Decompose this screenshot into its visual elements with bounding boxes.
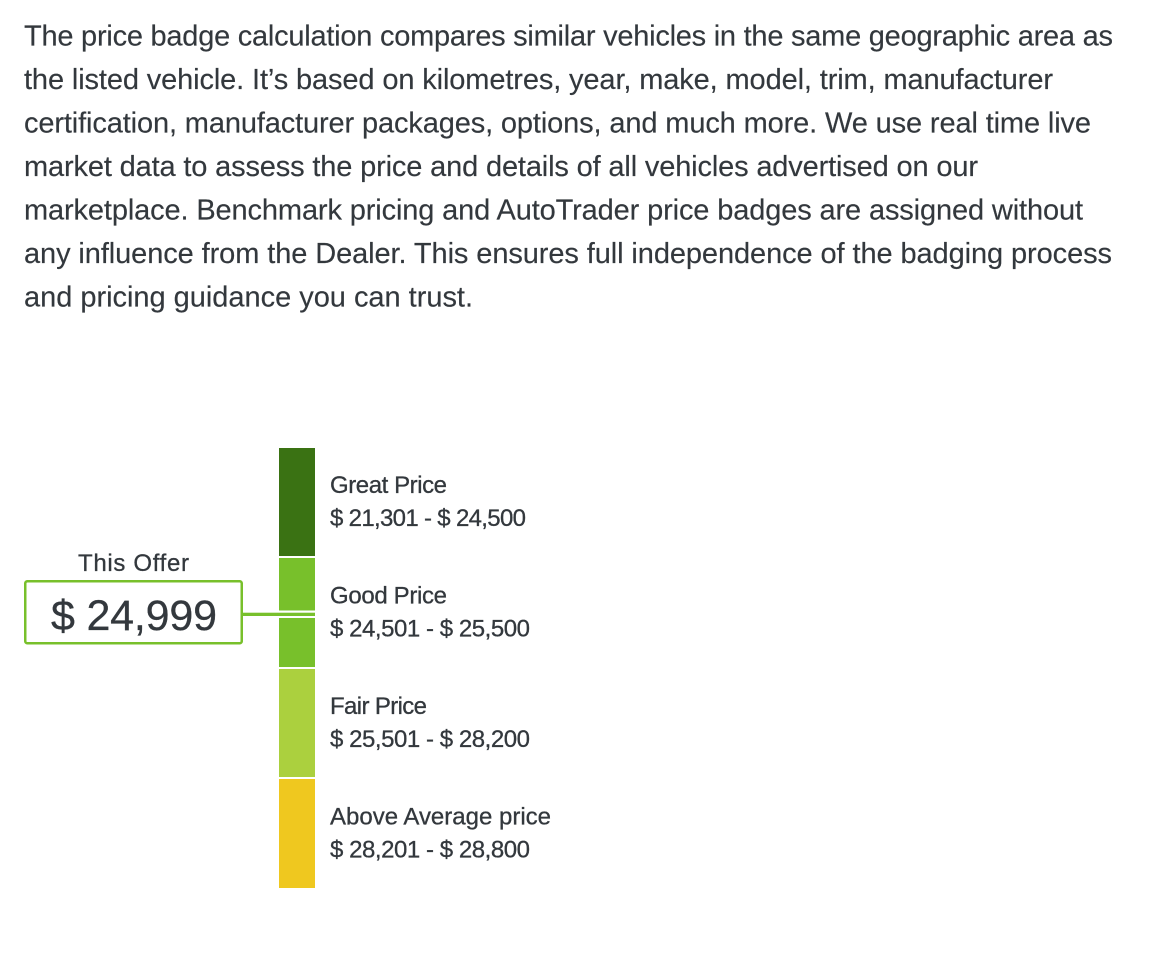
segment: fair price [279, 669, 315, 777]
text block: price badge explanation: and pricing guidance you can trust. [24, 282, 473, 314]
text block: price badge explanation: certification, manufacturer packages, options, and much more. We use real time live [24, 108, 1091, 140]
label: above average price: $ 28,201 - $ 28,800 [330, 836, 530, 864]
offer label: This Offer [78, 550, 189, 577]
text block: price badge explanation: market data to assess the price and details of all vehicles advertised on our [24, 151, 978, 183]
label: above average price [330, 804, 551, 864]
text block: price badge explanation: any influence from the Dealer. This ensures full independence of the badging process [24, 238, 1112, 270]
offer price box: $ 24,999 [51, 592, 217, 640]
offer price box [25, 581, 242, 643]
label: fair price: Fair Price [330, 693, 427, 720]
text block: price badge explanation: the listed vehicle. It’s based on kilometres, year, make, model, trim, manufacturer [24, 64, 1053, 96]
text block: price badge explanation: marketplace. Benchmark pricing and AutoTrader price badges are assigned without [24, 194, 1083, 226]
label: good price [330, 582, 530, 642]
segment: great price [279, 448, 315, 556]
label: great price: Great Price [330, 472, 447, 499]
label: above average price: Above Average price [330, 804, 551, 830]
segment: good price [279, 558, 315, 667]
label: fair price [330, 693, 530, 753]
label: fair price: $ 25,501 - $ 28,200 [330, 726, 530, 753]
price scale bar [279, 448, 315, 888]
label: good price: Good Price [330, 582, 447, 610]
label: great price [330, 472, 526, 532]
label: great price: $ 21,301 - $ 24,500 [330, 505, 526, 532]
label: good price: $ 24,501 - $ 25,500 [330, 616, 530, 642]
segment: above average price [279, 779, 315, 888]
text block: price badge explanation [24, 20, 1113, 314]
connector from offer to good price segment [243, 610, 315, 618]
text block: price badge explanation: The price badge calculation compares similar vehicles in the same geographic area as [24, 20, 1113, 52]
